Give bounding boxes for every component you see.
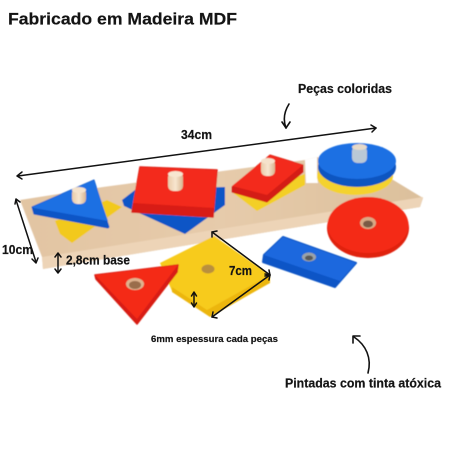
label: non-toxic paint: Pintadas com tinta atóxica [285,376,442,390]
label: 34cm: 34cm [181,128,212,142]
toy photo: wooden board with coloured shapes [20,143,423,324]
piece: loose red triangle [95,265,178,324]
arrow: base height [55,253,61,273]
piece: yellow square under triangle [55,200,122,243]
piece: loose yellow diamond [160,236,270,317]
curved arrow: coloured pieces [282,104,290,128]
piece: yellow rectangle [232,174,305,211]
piece: blue square under red square [122,187,225,234]
arrow: piece side 7cm [212,231,270,318]
curved arrow: non-toxic paint [353,336,369,373]
piece: yellow disc [317,157,393,195]
label: 2,8cm base: 2,8cm base [66,254,130,268]
wooden board [20,157,423,269]
piece: red rectangle [232,155,303,202]
piece: loose red disc [327,197,409,258]
arrow: depth 10cm [15,199,38,263]
label: coloured pieces: Peças coloridas [298,82,392,96]
peg on blue disc [352,144,367,163]
label: 10cm: 10cm [2,243,33,257]
piece: loose blue rectangle [263,237,356,287]
piece: blue disc [318,143,396,187]
arrow: width 34cm [17,125,376,179]
piece: red square [132,167,217,217]
label: thickness: 6mm espessura cada peças [151,334,278,345]
arrow: piece thickness [192,292,196,307]
peg on red square [168,171,183,191]
title: Fabricado em Madeira MDF [8,10,237,28]
peg on red rectangle [261,158,275,176]
piece: blue triangle [32,180,109,228]
label: 7cm: 7cm [229,264,252,278]
peg on triangle [72,187,86,204]
